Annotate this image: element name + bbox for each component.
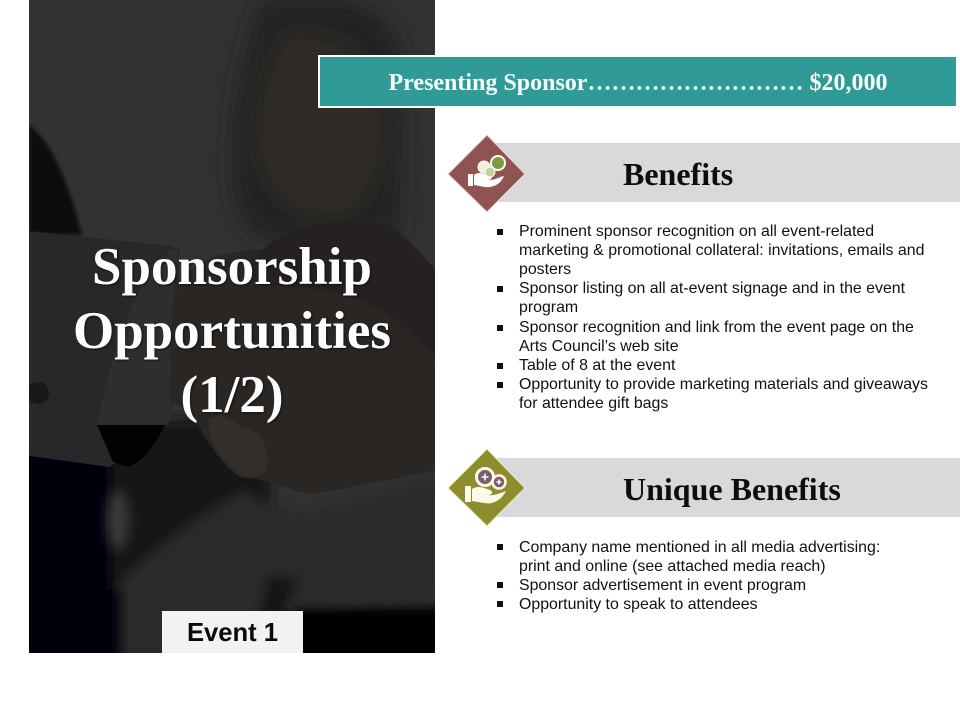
banner: Presenting Sponsor price — [318, 55, 958, 108]
bullet list: unique benefits: Company name mentioned in all media advertising: — [519, 539, 880, 556]
bullet list: benefits: posters — [519, 261, 571, 278]
panel: handshake photo — [29, 0, 435, 653]
icon: diamond with hand and coins — [448, 134, 526, 212]
bullet list: benefits: program — [519, 299, 578, 316]
bullet list: benefits: Sponsor recognition and link from the event page on the — [519, 319, 914, 336]
bullet list: benefits: Sponsor listing on all at-event signage and in the event — [519, 280, 905, 297]
bullet list: benefits: Arts Council’s web site — [519, 338, 679, 355]
label: Event 1 — [162, 611, 303, 653]
title: Sponsorship Opportunities (1/2): Sponsorship — [92, 238, 372, 296]
heading: Benefits: Benefits — [623, 156, 733, 192]
bullet list: unique benefits: Sponsor advertisement in event program — [519, 577, 806, 594]
icon: diamond with hand and plus coins — [448, 448, 526, 526]
section band: Benefits — [486, 143, 960, 202]
title: Sponsorship Opportunities (1/2) — [73, 238, 391, 424]
bullet list: benefits: Opportunity to provide marketing materials and giveaways — [519, 376, 928, 393]
bullet list: benefits: Prominent sponsor recognition on all event-related — [519, 223, 874, 240]
title: Sponsorship Opportunities (1/2): (1/2) — [180, 366, 284, 424]
label: Event 1: Event 1 — [187, 619, 278, 647]
title: Sponsorship Opportunities (1/2): Opportunities — [73, 302, 391, 360]
heading: Unique Benefits: Unique Benefits — [623, 471, 841, 507]
bullet list: unique benefits: Opportunity to speak to attendees — [519, 596, 758, 613]
bullet list: unique benefits — [497, 539, 880, 613]
bullet list: benefits: for attendee gift bags — [519, 395, 668, 412]
bullet list: benefits — [497, 223, 928, 412]
bullet list: benefits: marketing & promotional collateral: invitations, emails and — [519, 242, 924, 259]
section band: Unique Benefits — [486, 458, 960, 517]
bullet list: benefits: Table of 8 at the event — [519, 357, 675, 374]
banner: Presenting Sponsor price: Presenting Sponsor……………………… $20,000 — [389, 70, 887, 96]
bullet list: unique benefits: print and online (see attached media reach) — [519, 558, 826, 575]
